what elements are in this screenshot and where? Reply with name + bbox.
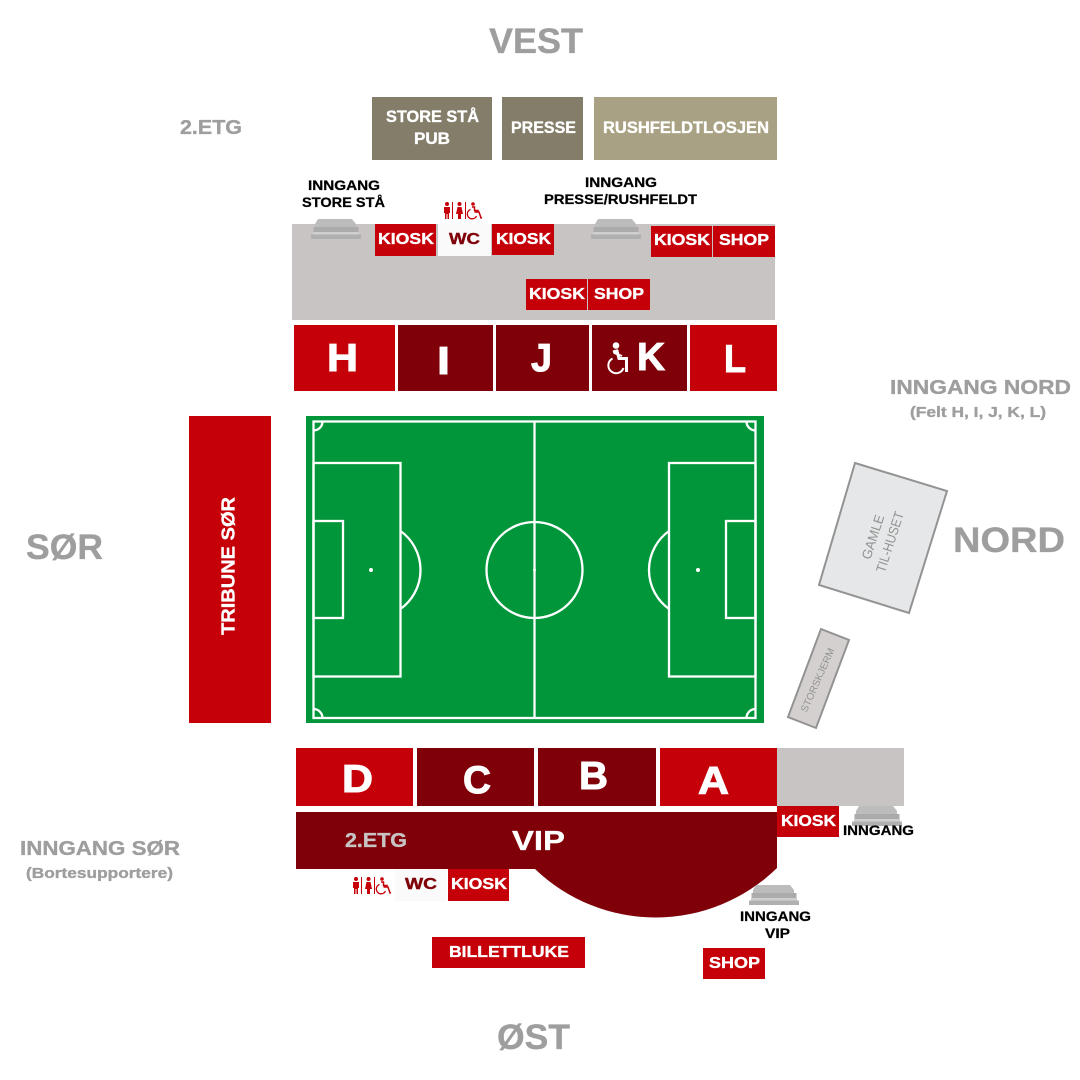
section D: [296, 748, 413, 806]
WC west: WC: [449, 231, 481, 248]
label: Inngang Store Stå: STORE STÅ: [302, 195, 385, 210]
shop east: [703, 948, 765, 979]
WC east: [395, 869, 447, 901]
section I: I: [437, 340, 450, 383]
icon: stairs east: [852, 806, 902, 826]
section I: [398, 325, 493, 391]
shop east: SHOP: [709, 955, 760, 972]
big screen: Storskjerm: STORSKJERM: [799, 647, 837, 714]
shop west 1: [713, 226, 775, 257]
label: Inngang Presse/Rushfeldt: [544, 175, 698, 207]
kiosk west 1: KIOSK: [378, 231, 434, 248]
icon: WC east: [353, 877, 391, 894]
panel: Presse: PRESSE: [511, 119, 576, 137]
building: Gamle TIL-huset: [819, 463, 947, 613]
label: Inngang Nord: (Felt H, I, J, K, L): [910, 405, 1046, 421]
section J: [496, 325, 589, 391]
panel: Store Stå Pub: STORE STÅ: [386, 107, 479, 126]
panel: VIP: VIP: [512, 825, 565, 856]
section J: J: [531, 337, 552, 380]
icon: wheelchair: [608, 342, 626, 373]
icon: stairs Store Stå: [311, 219, 361, 239]
football pitch: [306, 416, 764, 723]
kiosk west 4: [526, 279, 587, 310]
section A: [660, 748, 777, 806]
WC east: WC: [405, 876, 438, 893]
heading: ØST: ØST: [497, 1018, 570, 1057]
kiosk west 2: [492, 224, 554, 255]
label: Inngang VIP: INNGANG: [740, 909, 811, 924]
label: Inngang Presse/Rushfeldt: PRESSE/RUSHFELDT: [544, 192, 698, 207]
kiosk east: KIOSK: [781, 813, 836, 830]
billettluke: [432, 937, 585, 968]
shop west 2: [588, 279, 650, 310]
section C: C: [463, 759, 491, 802]
panel: east concourse: [777, 748, 904, 806]
panel: VIP: [296, 812, 777, 917]
panel: Store Stå Pub: [372, 97, 492, 160]
label: Inngang east: INNGANG: [843, 823, 914, 838]
section L: L: [724, 338, 746, 381]
building: Gamle TIL-huset: GAMLE: [859, 513, 887, 561]
label: 2.ETG: 2.ETG: [180, 117, 242, 139]
kiosk west 2: KIOSK: [496, 231, 551, 248]
panel: Store Stå Pub: PUB: [414, 130, 450, 148]
kiosk west 1: [375, 224, 436, 256]
icon: stairs Presse: [591, 219, 641, 239]
label: Inngang Nord: INNGANG NORD: [890, 377, 1071, 399]
label: Inngang Sør: INNGANG SØR: [20, 838, 181, 860]
section D: D: [342, 758, 373, 801]
panel: Tribune Sør: [189, 416, 271, 723]
section K: [592, 325, 687, 391]
heading: VEST: VEST: [489, 22, 583, 61]
heading: SØR: SØR: [26, 528, 103, 567]
panel: Rushfeldtlosjen: RUSHFELDTLOSJEN: [603, 119, 769, 137]
label: Inngang Store Stå: [302, 178, 385, 210]
label: Inngang VIP: VIP: [765, 926, 790, 941]
panel: west concourse: [292, 224, 775, 320]
label: Inngang VIP: [740, 909, 811, 941]
section A: A: [698, 760, 729, 803]
kiosk west 4: KIOSK: [529, 286, 585, 303]
panel: Tribune Sør: TRIBUNE SØR: [218, 497, 238, 635]
section B: B: [579, 755, 608, 798]
section C: [417, 748, 534, 806]
panel: Presse: [502, 97, 583, 160]
label: Inngang Sør: [20, 838, 181, 882]
billettluke: BILLETTLUKE: [449, 944, 569, 961]
section H: [294, 325, 395, 391]
WC west: [438, 224, 491, 256]
kiosk east: [777, 806, 839, 837]
kiosk west 3: [651, 226, 712, 257]
section B: [538, 748, 656, 806]
kiosk west 3: KIOSK: [654, 232, 710, 249]
shop west 2: SHOP: [594, 286, 644, 303]
big screen: Storskjerm: [788, 629, 849, 728]
shop west 1: SHOP: [719, 232, 769, 249]
section L: [690, 325, 777, 391]
label: Inngang Presse/Rushfeldt: INNGANG: [585, 175, 657, 190]
heading: NORD: NORD: [953, 521, 1065, 560]
section H: H: [327, 337, 358, 380]
icon: stairs VIP: [749, 885, 799, 905]
panel: Rushfeldtlosjen: [594, 97, 777, 160]
kiosk VIP: KIOSK: [451, 876, 507, 893]
building: Gamle TIL-huset: TIL-HUSET: [873, 510, 907, 574]
section K: K: [637, 336, 665, 379]
label: Inngang Nord: [890, 377, 1071, 421]
icon: WC west: [444, 202, 482, 219]
label: Inngang Store Stå: INNGANG: [308, 178, 380, 193]
label: Inngang Sør: (Bortesupportere): [26, 866, 173, 882]
kiosk VIP: [448, 869, 509, 901]
panel: VIP: 2.ETG: [345, 830, 407, 852]
